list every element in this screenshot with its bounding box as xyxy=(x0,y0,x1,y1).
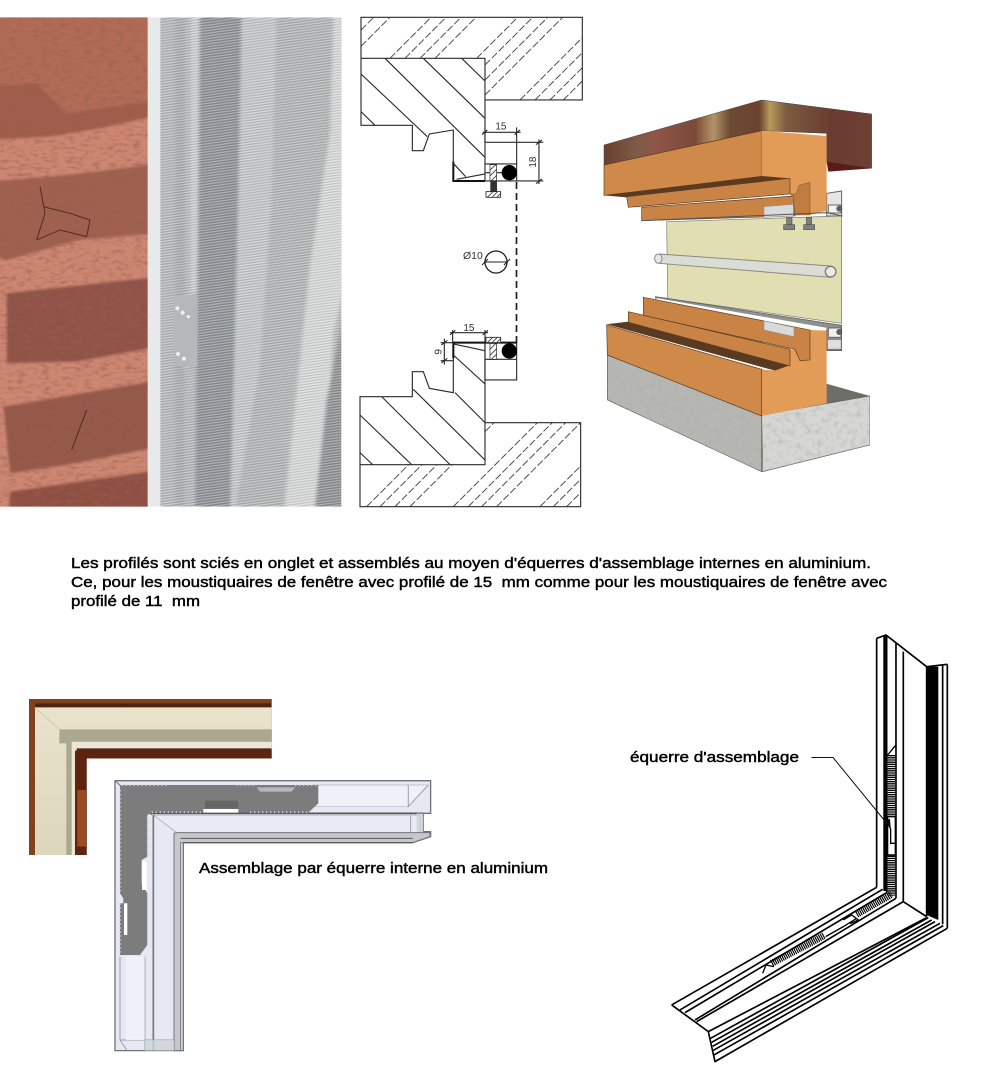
aluminium rail, bottom xyxy=(656,297,842,351)
screw xyxy=(490,181,497,192)
brick wall xyxy=(0,17,148,507)
wood profile, bottom xyxy=(360,343,485,465)
dimension 18 xyxy=(517,139,543,184)
leader arrow xyxy=(812,758,891,831)
concrete sill xyxy=(825,383,870,405)
wood frame, bottom xyxy=(762,330,827,416)
mesh bands xyxy=(195,7,242,520)
dimension 9 xyxy=(433,339,453,365)
bracket xyxy=(120,785,318,955)
dimension 15 xyxy=(450,323,488,343)
caption paragraph: Ce, pour les moustiquaires de fenêtre avec profilé de 15 mm comme pour les moustiquaires de fenêtre avec xyxy=(71,575,887,591)
screen panel xyxy=(655,216,842,323)
photo: mitred frame corner xyxy=(29,699,272,855)
brick lintel xyxy=(604,100,872,168)
dimension 15 xyxy=(482,122,521,142)
dimension 18: 18 xyxy=(528,156,539,168)
bottom member xyxy=(672,887,947,1062)
screws, top xyxy=(784,217,815,230)
caption paragraph: Les profilés sont sciés en onglet et assemblés au moyen d'équerres d'assemblage internes en aluminium. xyxy=(71,556,871,572)
dimension 15: 15 xyxy=(495,122,507,133)
technical section: bottom frame detail xyxy=(360,323,581,507)
rod diameter 10 xyxy=(463,250,510,273)
mesh dashed line xyxy=(516,182,518,345)
bracket hatching, horizontal xyxy=(763,894,892,973)
aluminium profile with rubber seal, bottom xyxy=(485,343,517,380)
window frame strip xyxy=(148,17,160,507)
photo: mosquito screen frame against brick wall xyxy=(0,7,347,520)
diagram: mitred profile with internal aluminium corner bracket xyxy=(115,781,431,1051)
callout: équerre d'assemblage: équerre d'assemblage xyxy=(630,750,799,766)
label: internal aluminium bracket: Assemblage par équerre interne en aluminium xyxy=(199,861,548,877)
aluminium profile with rubber seal, top xyxy=(485,142,517,181)
masonry hatching, bottom xyxy=(367,423,581,507)
callout: équerre d'assemblage xyxy=(630,750,891,831)
technical section: top frame detail xyxy=(361,17,582,197)
masonry hatching, top xyxy=(361,17,582,100)
wood profile, top xyxy=(361,58,485,181)
wood frame, top xyxy=(604,131,762,195)
black vertical profile band xyxy=(927,667,938,920)
vertical member xyxy=(877,635,947,928)
3D cutaway: window frame with screen xyxy=(604,100,872,472)
frame clip hardware xyxy=(173,295,197,367)
rod xyxy=(655,254,836,277)
dimension 9: 9 xyxy=(433,349,444,355)
technical section: screen mesh and rod xyxy=(463,182,516,345)
dimension 15: 15 xyxy=(463,323,475,334)
line drawing: corner bracket inside frame xyxy=(672,635,947,1062)
profile body xyxy=(115,781,431,1051)
caption paragraph xyxy=(71,556,887,610)
bracket hatching, vertical xyxy=(888,746,895,896)
caption paragraph: profilé de 11 mm xyxy=(71,594,200,610)
rod diameter 10: Ø10 xyxy=(463,250,483,262)
aluminium rail, top xyxy=(827,191,842,216)
